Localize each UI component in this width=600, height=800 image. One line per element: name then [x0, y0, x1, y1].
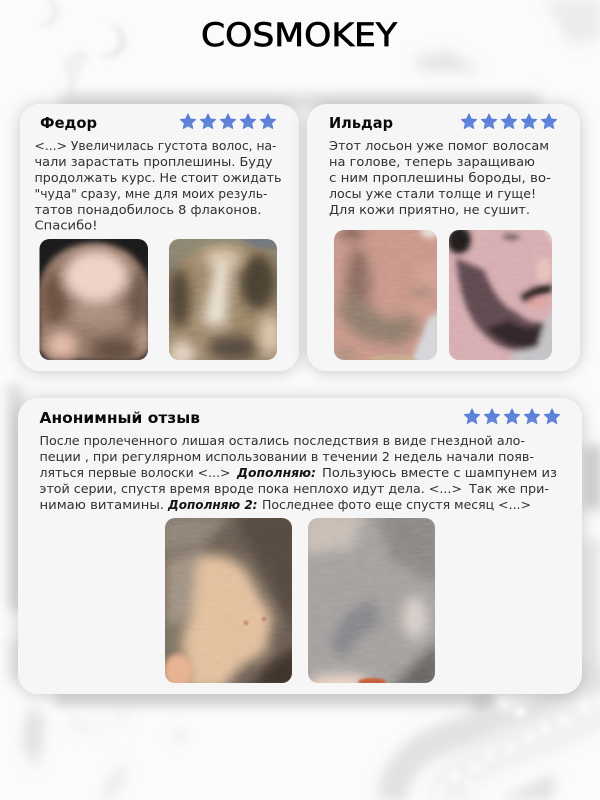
review text — [34, 139, 282, 234]
review text — [40, 434, 557, 513]
review text: нимаю витамины. — [40, 498, 164, 513]
review text: чали зарастать проплешины. Буду — [34, 155, 273, 170]
panel: anonymous review — [18, 398, 582, 694]
review text: Дополняю: — [236, 466, 316, 481]
review text: <...> Увеличилась густота волос, на- — [34, 139, 276, 154]
shadows behind the milk ribbons — [8, 94, 600, 717]
review text: с ним проплешины бороды, во- — [329, 171, 551, 186]
photo: beard after — [449, 230, 552, 360]
panel: review Fedor — [20, 104, 299, 371]
panel: review Ildar — [307, 104, 580, 371]
review text: Так же при- — [468, 482, 549, 497]
photo: balding crown before — [39, 239, 150, 362]
review text: Спасибо! — [34, 218, 98, 234]
review text: продолжать курс. Не стоит ожидать — [34, 171, 282, 186]
milk ribbons — [392, 665, 600, 800]
review text: Этот лосьон уже помог волосам — [329, 139, 549, 154]
review text: Для кожи приятно, не сушит. — [329, 203, 530, 218]
review text: этой серии, спустя время вроде пока неплохо идут дела. <...> — [40, 482, 462, 497]
beads — [434, 696, 591, 796]
photo: beard before — [333, 226, 440, 365]
name: anonymous review: Анонимный отзыв — [40, 409, 200, 427]
name: Ildar: Ильдар — [329, 114, 393, 132]
name: Fedor: Федор — [40, 114, 97, 132]
review text: Пользуюсь вместе с шампунем из — [322, 466, 557, 481]
review text: ляться первые волоски <...> — [40, 466, 230, 481]
review text: Последнее фото еще спустя месяц <...> — [262, 498, 531, 513]
review text: "чуда" сразу, мне для моих резуль- — [34, 187, 268, 202]
photo: balding crown after — [169, 239, 277, 360]
review text: лосы уже стали толще и гуще! — [329, 187, 536, 202]
review text: Дополняю 2: — [167, 498, 258, 513]
review text: на голове, теперь заращиваю — [329, 155, 535, 170]
review text: пеции , при регулярном использовании в течении 2 недель начали появ- — [40, 450, 534, 465]
review text — [329, 139, 551, 218]
title: COSMOKEY — [201, 16, 397, 54]
photo: alopecia patch after — [308, 518, 435, 683]
rating stars — [180, 114, 276, 128]
review text: После пролеченного лишая остались последствия в виде гнездной ало- — [40, 434, 525, 449]
rating stars — [461, 114, 557, 128]
rating stars — [464, 409, 560, 424]
review text: татов понадобилось 8 флаконов. — [34, 203, 262, 218]
photo: alopecia patch before — [165, 518, 292, 683]
